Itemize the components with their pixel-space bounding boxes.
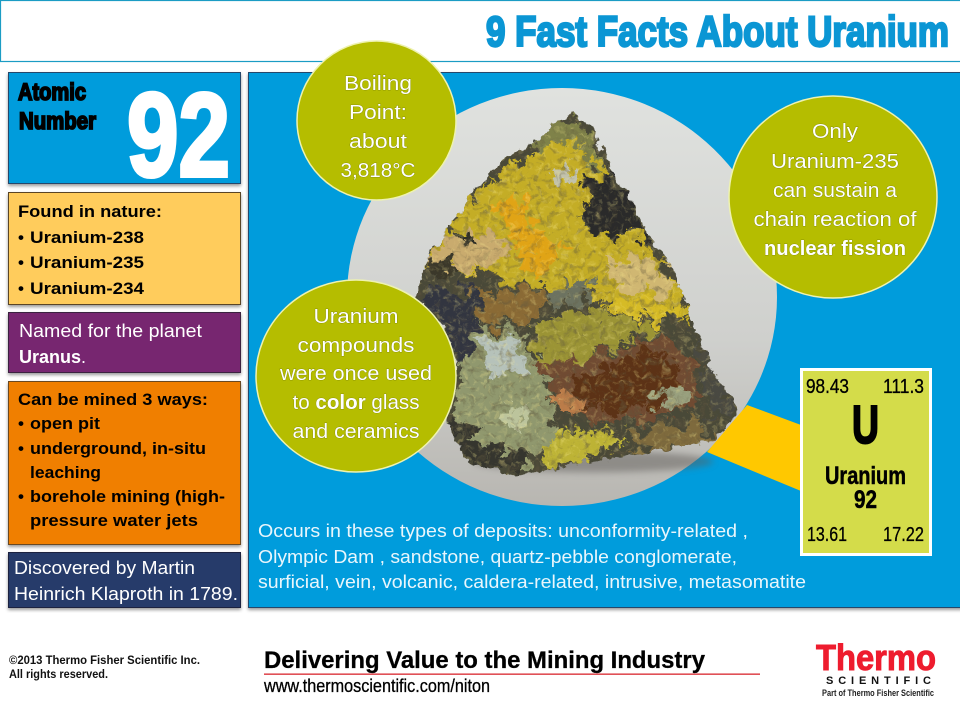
panel: main blue panel [248,72,960,608]
panel: mined 3 ways: open pit [30,414,100,433]
panel: named for Uranus: Named for the planet [19,321,202,341]
periodic table card: uranium: 98.43 [806,376,849,398]
atomic number value: 92 [127,69,230,202]
periodic table card: uranium: 111.3 [883,376,924,398]
connector wedge [707,405,801,491]
panel: found in nature: Uranium-234 [30,279,145,298]
callout: nuclear fission: nuclear fission [764,238,906,260]
logo: Thermo Scientific: Thermo [816,637,936,678]
text block: deposit types: surficial, vein, volcanic, caldera-related, intrusive, metasomatite [258,572,806,592]
atomic number label second line: Number [19,108,96,135]
footer: copyright [9,653,200,681]
callout: boiling point: about [349,131,407,153]
text block: deposit types [258,521,806,592]
panel: mined 3 ways: underground, in-situ [30,439,206,458]
panel: found in nature [8,192,240,304]
panel: discovered by: Discovered by Martin [14,558,195,578]
panel: discovered by: Heinrich Klaproth in 1789. [14,584,238,604]
rock photo [407,107,747,483]
atomic number label: Atomic [18,79,86,106]
panel: mined 3 ways: pressure water jets [30,511,198,530]
panel: mined 3 ways: leaching [30,463,101,482]
panel: named for Uranus [8,312,240,372]
panel: named for Uranus: . [81,347,86,367]
periodic table card: uranium: 17.22 [883,524,924,546]
footer: copyright: ©2013 Thermo Fisher Scientific Inc. [9,653,200,667]
periodic table card: uranium: Uranium [825,462,906,490]
panel: discovered by [8,552,240,608]
photo backdrop disc [347,88,777,506]
callout: boiling point: Boiling [344,73,412,95]
callout: color glass and ceramics: were once used [279,363,432,385]
callout: nuclear fission: Only [812,121,858,143]
callout: nuclear fission [729,96,937,298]
callout: nuclear fission: Uranium-235 [771,151,899,173]
callout: nuclear fission: chain reaction of [754,209,917,231]
text block: deposit types: Olympic Dam , sandstone, quartz-pebble conglomerate, [258,547,737,567]
panel: found in nature: Uranium-238 [30,228,144,247]
footer: tagline: www.thermoscientific.com/niton [263,676,490,696]
panel: mined 3 ways [8,382,240,544]
periodic table card: uranium: U [852,395,879,455]
panel: found in nature: • [18,228,24,247]
footer: tagline: Delivering Value to the Mining Industry [264,647,706,674]
panel: found in nature: • [18,279,24,298]
panel: mined 3 ways: Can be mined 3 ways: [18,390,208,409]
callout: boiling point: Point: [349,102,407,124]
panel: named for Uranus: Uranus [19,347,81,367]
callout: color glass and ceramics: to color glass [292,392,419,414]
panel: found in nature: Uranium-235 [30,253,144,272]
panel: atomic number [8,69,240,202]
panel: found in nature: • [18,253,24,272]
callout: boiling point [297,41,456,200]
panel: mined 3 ways: • [18,487,24,506]
logo: Thermo Scientific: SCIENTIFIC [826,675,931,687]
callout: color glass and ceramics [256,280,456,472]
callout: color glass and ceramics: Uranium [314,306,398,328]
panel: mined 3 ways: • [18,439,24,458]
periodic table card: uranium: 92 [854,486,877,514]
callout: color glass and ceramics: compounds [298,335,414,357]
footer: copyright: All rights reserved. [9,667,108,681]
callout: boiling point: 3,818°C [340,160,416,182]
callout: color glass and ceramics: and ceramics [292,421,420,443]
panel: mined 3 ways: borehole mining (high- [30,487,225,506]
callout: nuclear fission: can sustain a [773,180,898,202]
header banner [0,0,960,62]
panel: found in nature: Found in nature: [18,202,162,221]
panel: mined 3 ways: • [18,414,24,433]
footer: tagline [263,647,760,696]
logo: Thermo Scientific: Part of Thermo Fisher Scientific [822,688,934,698]
logo: Thermo Scientific [816,637,936,698]
periodic table card: uranium: 13.61 [807,524,847,546]
periodic table card: uranium [802,370,930,554]
text block: deposit types: Occurs in these types of deposits: unconformity-related , [258,521,748,541]
